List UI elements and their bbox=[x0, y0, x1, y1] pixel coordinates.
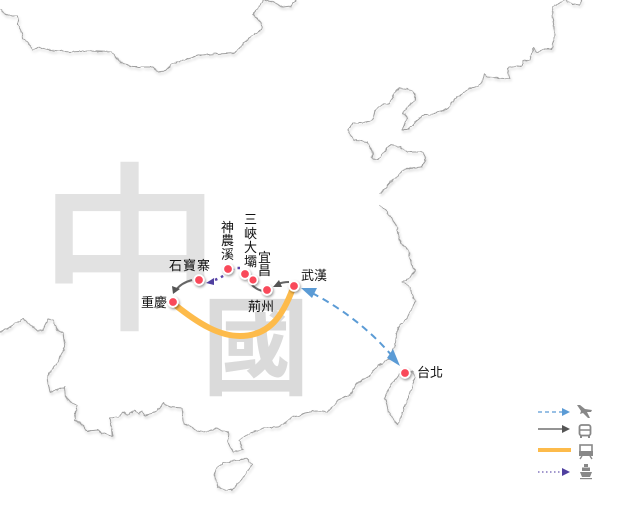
legend: bus bbox=[538, 425, 590, 438]
label: 神農溪 bbox=[221, 220, 234, 262]
icon: train bbox=[579, 445, 593, 459]
label: 宜昌: 昌 bbox=[258, 263, 271, 278]
label: 武漢: 武漢 bbox=[301, 268, 327, 283]
label: 三峽大壩: 峽 bbox=[244, 226, 257, 241]
route: bus, Wuhan to Jingzhou bbox=[273, 280, 289, 287]
stop: Taipei bbox=[400, 368, 410, 378]
label: 台北: 台北 bbox=[417, 365, 443, 380]
route: train, Chongqing to Wuhan bbox=[174, 288, 293, 336]
label: 三峽大壩: 三 bbox=[244, 212, 257, 227]
northern border west bbox=[0, 0, 296, 72]
label: 石寶寨: 石寶寨 bbox=[169, 258, 211, 273]
legend: boat bbox=[538, 464, 592, 479]
label: 宜昌 bbox=[258, 250, 271, 278]
legend: train bbox=[538, 445, 593, 459]
arrowhead: Taipei end bbox=[387, 349, 400, 366]
label: 三峽大壩: 壩 bbox=[244, 254, 257, 269]
stop: Three Gorges Dam bbox=[240, 269, 250, 279]
stop: Chongqing bbox=[168, 297, 178, 307]
stop: Wuhan bbox=[289, 281, 299, 291]
label: 三峽大壩 bbox=[244, 212, 257, 269]
route: bus, Shibaozhai to Chongqing bbox=[172, 280, 192, 294]
stops bbox=[168, 264, 410, 378]
stop: Shibaozhai bbox=[194, 275, 204, 285]
stop: Shennongxi bbox=[223, 264, 233, 274]
stop: Yichang bbox=[249, 276, 257, 284]
label: 神農溪: 神 bbox=[221, 220, 234, 235]
stop: Jingzhou bbox=[262, 285, 272, 295]
arrowhead: Wuhan end bbox=[301, 288, 317, 298]
label: 神農溪: 溪 bbox=[221, 247, 234, 262]
Hainan bbox=[214, 458, 252, 490]
north-east border and Liaodong coast bbox=[348, 0, 582, 193]
label: 宜昌: 宜 bbox=[258, 250, 271, 265]
legend: flight bbox=[538, 405, 592, 418]
icon: bus bbox=[580, 425, 590, 438]
label: 重慶: 重慶 bbox=[141, 295, 167, 310]
Taiwan bbox=[385, 372, 415, 425]
route: boat, Three Gorges to Shibaozhai bbox=[206, 268, 240, 285]
icon: plane bbox=[577, 405, 592, 418]
east and south coast bbox=[0, 205, 415, 452]
route: bus, Jingzhou to Yichang bbox=[252, 285, 263, 291]
route: flight, Wuhan to Taipei bbox=[301, 288, 400, 366]
label: 神農溪: 農 bbox=[221, 233, 234, 248]
icon: ship bbox=[580, 464, 592, 479]
label: 荊州: 荊州 bbox=[248, 299, 274, 314]
legend bbox=[538, 405, 593, 479]
label: 三峽大壩: 大 bbox=[244, 240, 257, 255]
watermark: 國: 國 bbox=[202, 288, 310, 409]
watermark: 中: 中 bbox=[40, 153, 220, 354]
